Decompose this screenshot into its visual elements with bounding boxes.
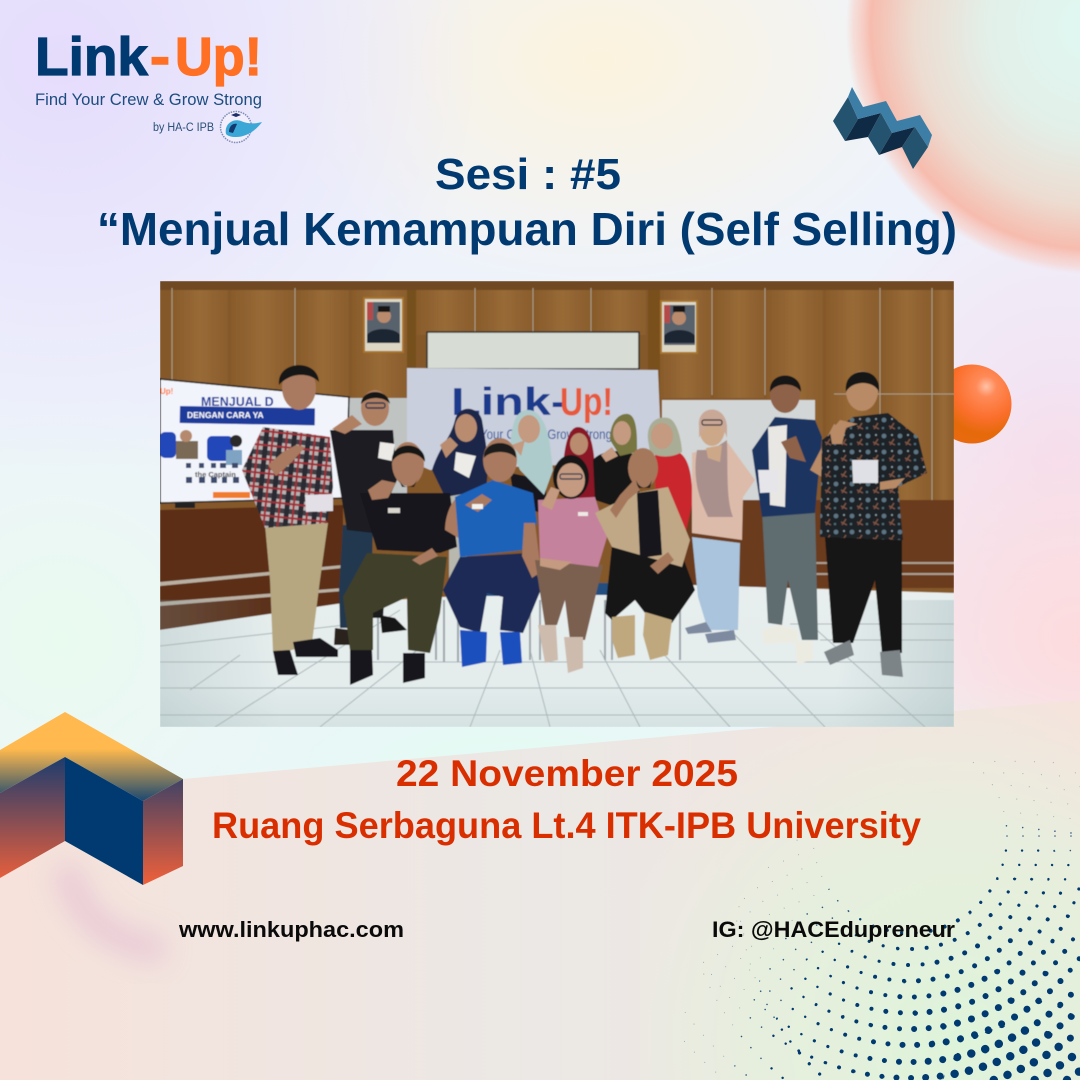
- icon: 3D cube: [0, 712, 183, 885]
- person: olive hijab black top: [593, 414, 640, 505]
- banner: Your Crew & Grow Strong: [480, 426, 612, 442]
- halftone dots: [684, 760, 1080, 1080]
- banner: Up!: [560, 381, 613, 424]
- upper whiteboard: [427, 332, 639, 369]
- window beside banner: [349, 398, 407, 508]
- TV screen: the Captain: [195, 470, 236, 479]
- instagram handle: IG: @HACEdupreneur: [712, 917, 955, 942]
- logo: Link-Up: Find Your Crew & Grow Strong: [35, 91, 262, 109]
- TV screen: Up!: [160, 387, 173, 396]
- logo: Link-Up: -: [150, 27, 170, 87]
- banner: [407, 368, 662, 470]
- logo: Link-Up: Up!: [175, 27, 262, 87]
- person: pink scarf woman: [685, 409, 755, 643]
- person: beige jacket: [595, 448, 695, 660]
- photo wall: [160, 281, 954, 601]
- wall portraits: [364, 298, 697, 353]
- chair seats: [486, 582, 609, 597]
- date and venue: 22 November 2025: [396, 753, 738, 794]
- date and venue: [212, 753, 921, 846]
- person: plaid shirt: [242, 365, 338, 675]
- person: seated pink top: [535, 455, 607, 673]
- icon: orange sphere: [932, 364, 1012, 444]
- lower whiteboard: [662, 400, 815, 500]
- TV screen: MENJUAL D: [201, 395, 274, 409]
- salmon blob top right: [840, 0, 1080, 280]
- banner: Link-: [451, 381, 567, 424]
- person: seated black shirt: [343, 442, 457, 685]
- person: batik shirt: [810, 371, 927, 677]
- person: red top hijab: [648, 418, 692, 540]
- photo: group portrait: [160, 281, 954, 727]
- person: navy jacket: [752, 375, 822, 664]
- lower wall and cabinets: [160, 500, 954, 630]
- icon: zigzag 3D shape: [833, 87, 932, 169]
- logo: Link-Up: Link: [35, 27, 149, 87]
- title: Sesi : #5: [435, 150, 621, 199]
- person: blue polo: [443, 438, 542, 667]
- logo: Link-Up: [35, 27, 262, 142]
- TV screen: [160, 379, 349, 508]
- date and venue: Ruang Serbaguna Lt.4 ITK-IPB University: [212, 805, 921, 846]
- person: navy hijab: [432, 409, 488, 580]
- pink shadow under cube: [66, 865, 165, 950]
- floor: [160, 584, 954, 727]
- person: red hijab: [564, 426, 596, 498]
- website: www.linkuphac.com: [178, 917, 404, 942]
- chairs: [376, 600, 682, 662]
- lower background band: [0, 700, 1080, 1080]
- title: “Menjual Kemampuan Diri (Self Selling): [97, 203, 957, 255]
- person: teal hijab: [510, 410, 553, 515]
- green glow lower right: [640, 680, 1080, 1080]
- person: black shirt standing back: [330, 390, 407, 645]
- logo: Link-Up: by HA-C IPB: [153, 122, 214, 134]
- TV screen: DENGAN CARA YA: [187, 410, 264, 420]
- title: [97, 150, 957, 255]
